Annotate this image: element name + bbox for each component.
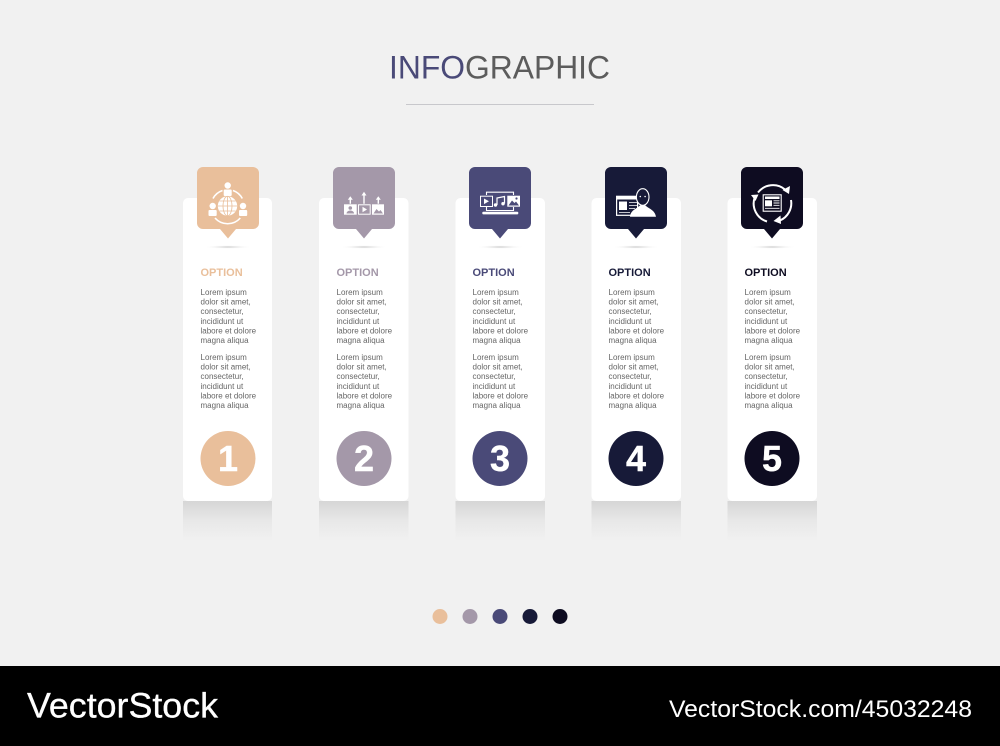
text block 1: Lorem ipsum (200, 288, 247, 297)
text block 3: Lorem ipsum (472, 353, 519, 362)
text block 3: incididunt ut (472, 317, 516, 326)
watermark bar: VectorStock.com/45032248 (669, 696, 972, 723)
text block 3: dolor sit amet, (472, 363, 523, 372)
text block 3: labore et dolore (472, 326, 529, 335)
text block 3: Lorem ipsum (472, 288, 519, 297)
pin 3 (469, 167, 531, 238)
text block 2: Lorem ipsum (336, 288, 383, 297)
icon: person with profile card (617, 189, 656, 217)
text block 2: incididunt ut (336, 317, 380, 326)
number badge 5: 5 (762, 438, 782, 479)
text block 4: incididunt ut (608, 317, 652, 326)
text block 1: consectetur, (200, 307, 244, 316)
icon: media upload (344, 192, 384, 215)
text block 5: Lorem ipsum (744, 353, 791, 362)
pin 2 (333, 167, 395, 238)
text block 3: magna aliqua (472, 336, 521, 345)
text block 3: consectetur, (472, 307, 516, 316)
number badge 2 (336, 431, 392, 486)
text block 4: labore et dolore (608, 326, 665, 335)
panel: option 1 (183, 167, 272, 541)
text block 5: dolor sit amet, (744, 298, 795, 307)
heading 3: OPTION (472, 267, 515, 279)
text block 4: labore et dolore (608, 391, 665, 400)
heading 1: OPTION (200, 267, 243, 279)
text block 4: Lorem ipsum (608, 353, 655, 362)
text block 2: consectetur, (336, 372, 380, 381)
text block 4 (608, 288, 665, 410)
text block 4: incididunt ut (608, 382, 652, 391)
number badge 1: 1 (218, 438, 238, 479)
text block 1: Lorem ipsum (200, 353, 247, 362)
text block 5: consectetur, (744, 307, 788, 316)
text block 5: dolor sit amet, (744, 363, 795, 372)
icon: news refresh (751, 185, 791, 224)
text block 5: magna aliqua (744, 401, 793, 410)
text block 3: consectetur, (472, 372, 516, 381)
text block 2: labore et dolore (336, 391, 393, 400)
text block 3: magna aliqua (472, 401, 521, 410)
heading 5: OPTION (744, 267, 787, 279)
watermark bar (0, 666, 1000, 746)
text block 4: magna aliqua (608, 336, 657, 345)
title: INFOGRAPHIC (389, 50, 610, 86)
text block 1: incididunt ut (200, 317, 244, 326)
text block 1: magna aliqua (200, 401, 249, 410)
text block 3: labore et dolore (472, 391, 529, 400)
text block 1: dolor sit amet, (200, 363, 251, 372)
text block 1: dolor sit amet, (200, 298, 251, 307)
number badge 1 (200, 431, 256, 486)
text block 1 (200, 288, 257, 410)
text block 5 (744, 288, 801, 410)
text block 4: consectetur, (608, 372, 652, 381)
icon: laptop with media (480, 192, 520, 214)
pin 5 (741, 167, 803, 238)
pin 1 (197, 167, 259, 238)
text block 2 (336, 288, 393, 410)
pin 4 (605, 167, 667, 238)
number badge 4: 4 (626, 438, 646, 479)
text block 1: labore et dolore (200, 326, 257, 335)
text block 5: incididunt ut (744, 317, 788, 326)
text block 3: dolor sit amet, (472, 298, 523, 307)
text block 2: magna aliqua (336, 401, 385, 410)
panel: option 5 (728, 167, 817, 541)
panel: option 2 (319, 167, 408, 541)
legend dots (432, 609, 568, 624)
text block 4: dolor sit amet, (608, 298, 659, 307)
heading 4: OPTION (608, 267, 651, 279)
number badge 3 (472, 431, 528, 486)
text block 2: consectetur, (336, 307, 380, 316)
number badge 2: 2 (354, 438, 374, 479)
text block 4: Lorem ipsum (608, 288, 655, 297)
text block 2: magna aliqua (336, 336, 385, 345)
text block 5: labore et dolore (744, 326, 801, 335)
watermark bar: VectorStock (27, 686, 219, 726)
text block 5: incididunt ut (744, 382, 788, 391)
text block 5: magna aliqua (744, 336, 793, 345)
text block 4: magna aliqua (608, 401, 657, 410)
text block 2: dolor sit amet, (336, 363, 387, 372)
text block 2: dolor sit amet, (336, 298, 387, 307)
text block 3 (472, 288, 529, 410)
text block 3: incididunt ut (472, 382, 516, 391)
text block 5: consectetur, (744, 372, 788, 381)
text block 2: labore et dolore (336, 326, 393, 335)
number badge 3: 3 (490, 438, 510, 479)
heading 2: OPTION (336, 267, 379, 279)
text block 1: consectetur, (200, 372, 244, 381)
panel: option 3 (456, 167, 545, 541)
text block 2: incididunt ut (336, 382, 380, 391)
text block 1: incididunt ut (200, 382, 244, 391)
text block 5: Lorem ipsum (744, 288, 791, 297)
text block 5: labore et dolore (744, 391, 801, 400)
number badge 5 (744, 431, 800, 486)
number badge 4 (608, 431, 664, 486)
text block 1: magna aliqua (200, 336, 249, 345)
text block 4: dolor sit amet, (608, 363, 659, 372)
icon: people around globe (208, 182, 247, 224)
panel: option 4 (592, 167, 681, 541)
text block 2: Lorem ipsum (336, 353, 383, 362)
text block 4: consectetur, (608, 307, 652, 316)
text block 1: labore et dolore (200, 391, 257, 400)
